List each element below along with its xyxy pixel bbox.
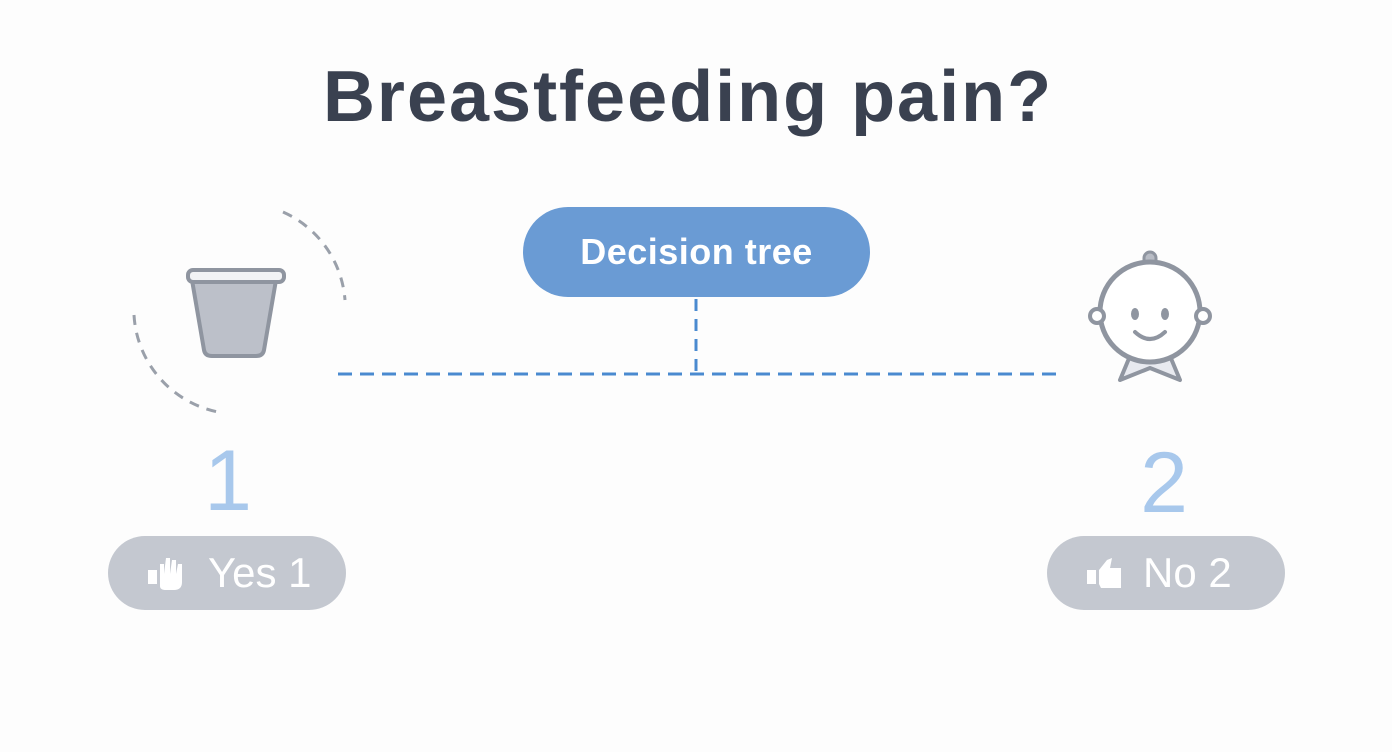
- icon: cup with dashed arcs: [132, 210, 346, 413]
- icon: thumb: [1087, 558, 1121, 588]
- no button: No 2: [1143, 549, 1232, 596]
- icon: hand: [148, 558, 182, 590]
- icon: baby: [1088, 250, 1212, 382]
- yes button: Yes 1: [208, 549, 312, 596]
- title: Breastfeeding pain?: [323, 57, 1053, 137]
- number 1: 1: [204, 433, 252, 529]
- number 2: 2: [1140, 435, 1188, 531]
- decision tree pill: Decision tree: [580, 231, 813, 272]
- decision tree pill: [523, 207, 870, 297]
- yes button: [108, 536, 346, 610]
- no button: [1047, 536, 1285, 610]
